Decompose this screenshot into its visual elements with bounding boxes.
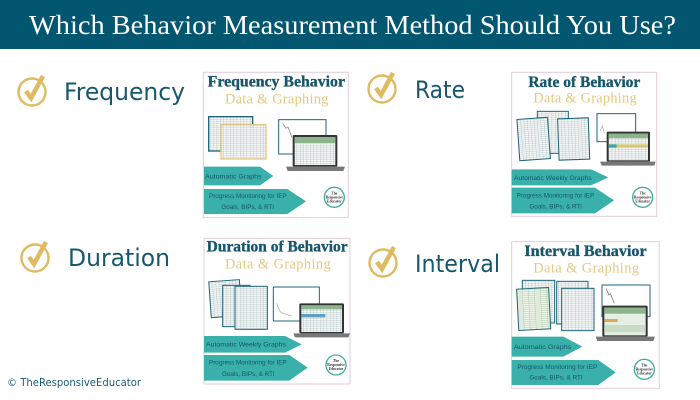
logo bbox=[326, 355, 346, 375]
card: Rate of Behavior: Data & Graphing bbox=[533, 91, 637, 107]
item: Interval bbox=[370, 247, 500, 278]
chart sheet bbox=[602, 285, 650, 317]
logo: Responsive bbox=[634, 195, 652, 199]
card: Duration of Behavior: Data & Graphing bbox=[225, 257, 331, 273]
item: Duration: Duration bbox=[68, 244, 170, 272]
laptop bbox=[596, 306, 655, 341]
arrow: automatic weekly graphs: Automatic Weekly Graphs bbox=[514, 175, 592, 182]
card: Duration of Behavior: Duration of Behavior bbox=[207, 239, 348, 256]
arrow: automatic weekly graphs bbox=[512, 169, 608, 185]
logo: The bbox=[641, 363, 648, 367]
arrow: progress monitoring bbox=[512, 188, 614, 213]
arrow: automatic graphs bbox=[512, 337, 582, 357]
arrow: progress monitoring bbox=[512, 360, 616, 385]
arrow: automatic weekly graphs bbox=[204, 336, 302, 353]
arrow: automatic graphs: Automatic Graphs bbox=[514, 344, 572, 351]
logo: Responsive bbox=[636, 367, 653, 371]
item: Rate bbox=[368, 73, 465, 104]
logo: Educator bbox=[637, 371, 652, 375]
arrow: progress monitoring: Goals, BIPs, & RTI bbox=[222, 371, 275, 378]
card: Frequency Behavior bbox=[203, 72, 348, 218]
logo: Educator bbox=[327, 199, 342, 203]
logo bbox=[633, 187, 653, 207]
card: Duration of Behavior bbox=[204, 238, 350, 384]
laptop bbox=[600, 132, 656, 166]
logo bbox=[634, 359, 654, 379]
arrow: progress monitoring: Progress Monitoring for IEP bbox=[209, 193, 287, 200]
logo: The bbox=[333, 359, 339, 363]
logo: Educator bbox=[635, 199, 650, 203]
logo: The bbox=[331, 191, 338, 195]
card: Frequency Behavior: Data & Graphing bbox=[225, 92, 328, 108]
logo: The bbox=[640, 191, 646, 195]
title banner: Which Behavior Measurement Method Should You Use? bbox=[29, 10, 676, 40]
card: Interval Behavior: Interval Behavior bbox=[524, 243, 647, 260]
logo: Responsive bbox=[327, 363, 345, 367]
item: Rate: Rate bbox=[415, 76, 465, 104]
card: Frequency Behavior: Frequency Behavior bbox=[208, 74, 345, 91]
card: Rate of Behavior bbox=[512, 72, 657, 216]
data sheets bbox=[209, 117, 266, 159]
arrow: automatic graphs: Automatic Graphs bbox=[205, 173, 262, 180]
arrow: progress monitoring: Progress Monitoring for IEP bbox=[517, 364, 598, 371]
arrow: progress monitoring: Progress Monitoring for IEP bbox=[209, 360, 287, 367]
data sheets bbox=[517, 280, 594, 331]
chart sheet bbox=[279, 120, 326, 154]
item: Frequency bbox=[18, 76, 185, 106]
card: Rate of Behavior: Rate of Behavior bbox=[528, 74, 641, 91]
arrow: automatic graphs bbox=[204, 167, 273, 185]
card: Interval Behavior bbox=[512, 242, 659, 388]
card: Interval Behavior: Data & Graphing bbox=[533, 261, 639, 277]
logo: Responsive bbox=[326, 195, 343, 199]
copyright: © TheResponsiveEducator bbox=[7, 377, 142, 389]
arrow: progress monitoring: Goals, BIPs, & RTI bbox=[529, 374, 583, 381]
arrow: progress monitoring bbox=[204, 355, 308, 381]
arrow: automatic weekly graphs: Automatic Weekly Graphs bbox=[206, 342, 287, 349]
chart sheet bbox=[273, 287, 319, 321]
arrow: progress monitoring: Progress Monitoring for IEP bbox=[517, 193, 595, 200]
data sheets bbox=[517, 111, 590, 161]
data sheets bbox=[209, 280, 267, 329]
item: Interval: Interval bbox=[415, 250, 500, 278]
chart sheet bbox=[597, 114, 636, 142]
arrow: progress monitoring: Goals, BIPs, & RTI bbox=[529, 204, 582, 211]
laptop bbox=[286, 135, 345, 171]
laptop bbox=[293, 303, 350, 337]
logo: Educator bbox=[329, 367, 344, 371]
item: Frequency: Frequency bbox=[64, 78, 185, 106]
title banner bbox=[0, 0, 700, 49]
arrow: progress monitoring: Goals, BIPs, & RTI bbox=[221, 204, 274, 211]
item: Duration bbox=[22, 242, 170, 272]
arrow: progress monitoring bbox=[204, 189, 306, 214]
logo bbox=[324, 187, 344, 207]
